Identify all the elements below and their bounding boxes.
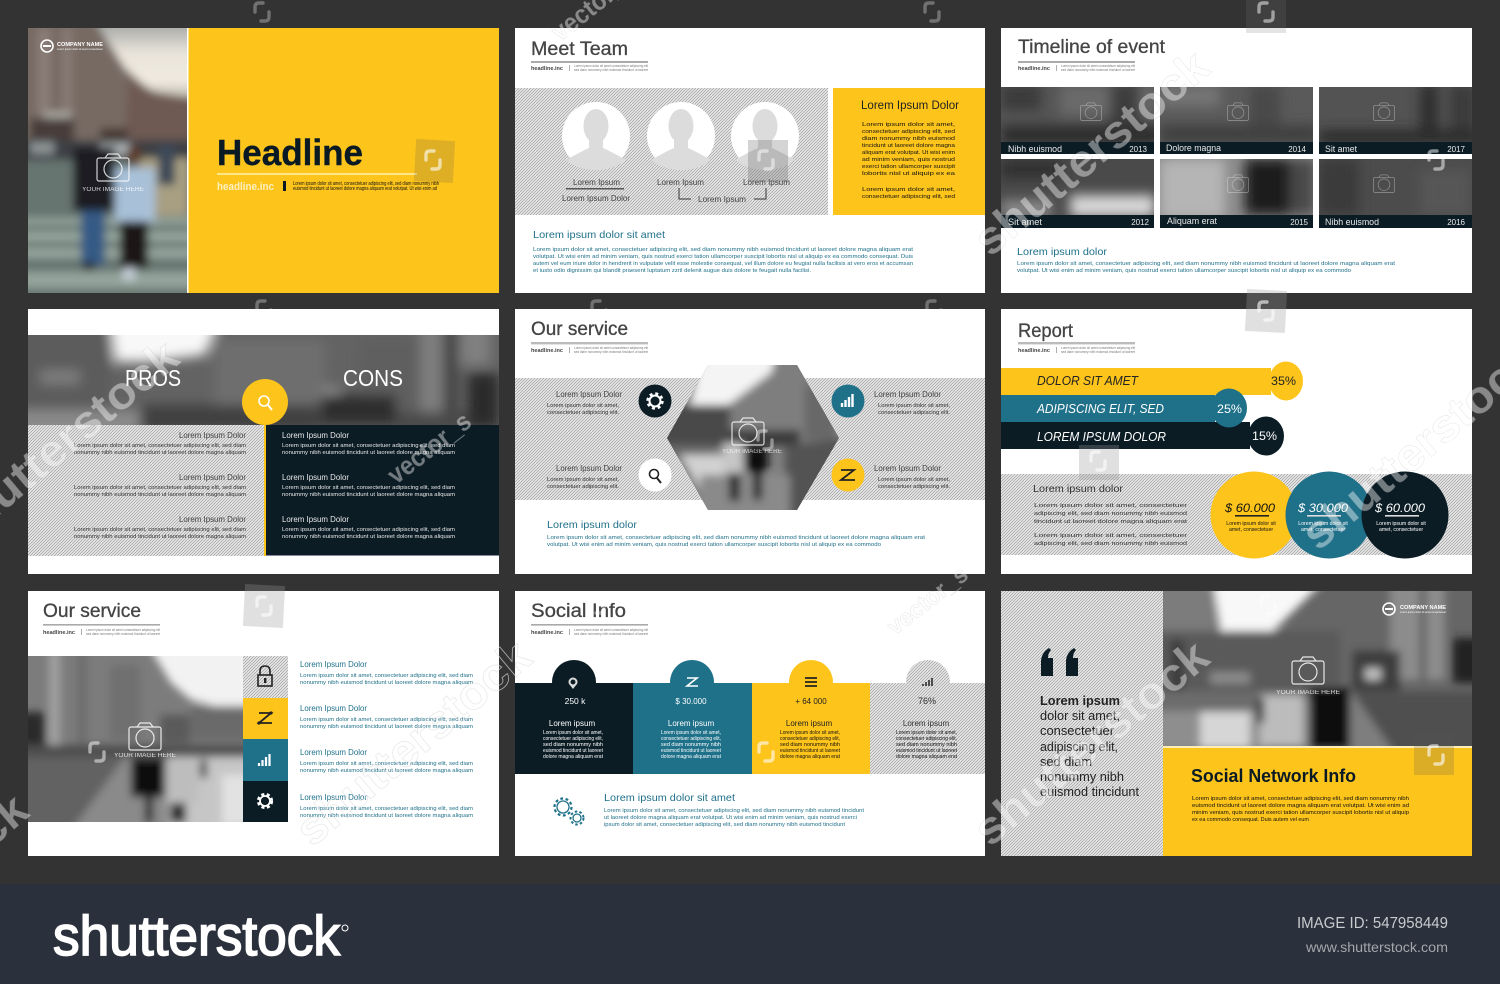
stat circle: yellow: amet, consectetuer <box>1229 527 1273 533</box>
bar chart: DOLOR SIT AMET <box>1037 374 1139 388</box>
slide heading: sed diam nonummy nibh euismod tincidunt ut laoreet <box>1061 350 1135 354</box>
report text: adipiscing elit, sed diam nonummy nibh euismod <box>1034 541 1187 547</box>
slide heading: Lorem ipsum dolor sit amet consectetuer adipiscing elit <box>1061 346 1135 350</box>
slide heading <box>43 601 160 636</box>
hatched band <box>515 88 828 215</box>
timeline body text <box>1017 246 1395 274</box>
pros column: Lorem ipsum dolor sit amet, consectetuer adipiscing elit, sed diam <box>74 527 246 533</box>
quote text <box>1040 693 1139 799</box>
slide heading <box>531 319 648 354</box>
stat column: dark: sed diam nonummy nibh <box>543 742 603 748</box>
service list text: Lorem Ipsum Dolor <box>300 659 367 669</box>
stock watermark overlays: vector_s <box>882 561 974 641</box>
cover subheading: euismod tincidunt ut laoreet dolore magna aliquam erat volutpat. Ut wisi enim ad <box>293 186 437 192</box>
stat column: yellow: sed diam nonummy nibh <box>780 742 840 748</box>
pros label: PROS <box>125 365 181 391</box>
team member names: Lorem Ipsum <box>573 177 620 187</box>
service items: Lorem Ipsum Dolor <box>874 389 941 399</box>
service items: consectetuer adipiscing elit. <box>547 484 619 490</box>
bar chart: ADIPISCING ELIT, SED <box>1036 402 1164 416</box>
pros column <box>28 425 264 556</box>
timeline card 2014: Dolore magna <box>1166 143 1221 153</box>
stat column: hatched: dolore magna aliquam erat <box>896 754 958 760</box>
timeline card 2016 <box>1319 159 1472 228</box>
social body text: ipsum dolor sit amet, consectetuer adipiscing elit, sed diam nonummy nibh euismod tincidunt <box>604 822 845 828</box>
stat column: teal: Lorem ipsum dolor sit amet, <box>661 730 721 736</box>
yellow info block: Social Network Info <box>1191 766 1356 786</box>
quote text: dolor sit amet, <box>1040 708 1120 723</box>
panel: meet team slide <box>515 28 985 293</box>
stat column: hatched: Lorem ipsum <box>903 719 949 728</box>
stat column: yellow: dolore magna aliquam erat <box>780 754 841 760</box>
social body text: Lorem ipsum dolor sit amet <box>604 792 735 804</box>
service items: Lorem Ipsum Dolor <box>556 463 622 473</box>
cover subheading: headline.inc <box>217 181 274 193</box>
report text <box>1033 483 1188 547</box>
icon: gears <box>554 798 584 824</box>
timeline card 2016: Nibh euismod <box>1325 217 1379 227</box>
stat column: yellow: consectetuer adipiscing elit, <box>780 736 840 742</box>
report text: Lorem ipsum dolor <box>1033 483 1124 495</box>
stat column: teal: consectetuer adipiscing elit, <box>661 736 721 742</box>
slide heading: Report <box>1018 321 1074 342</box>
slide heading: Lorem ipsum dolor sit amet consectetuer adipiscing elit <box>574 64 648 68</box>
stock watermark overlays: vector_s <box>381 406 477 490</box>
stat column: dark <box>515 660 633 774</box>
service items: Lorem ipsum dolor sit amet, <box>878 477 950 483</box>
timeline card 2013 <box>1001 87 1154 154</box>
stat circle: dark <box>1362 472 1448 558</box>
icon: search badge <box>638 458 672 492</box>
yellow info box: consectetuer adipiscing elit, sed <box>862 194 955 200</box>
stat column: teal: $ 30.000 <box>675 697 707 706</box>
cons column: nonummy nibh euismod tincidunt ut laoreet dolore magna aliquam <box>282 492 455 498</box>
cons column: Lorem ipsum dolor sit amet, consectetuer adipiscing elit, sed diam <box>282 527 455 533</box>
cons column: nonummy nibh euismod tincidunt ut laoreet dolore magna aliquam <box>282 534 455 540</box>
slide heading: headline.inc <box>531 66 563 72</box>
timeline card 2015 <box>1160 159 1313 228</box>
yellow info box: exerci tation ullamcorper suscipit <box>862 164 955 170</box>
service items: Lorem ipsum dolor sit amet, <box>878 403 950 409</box>
cons column: Lorem Ipsum Dolor <box>282 514 349 524</box>
stock watermark overlays: shutterstock <box>963 629 1219 856</box>
hatched band <box>515 378 985 500</box>
panel: timeline of event slide <box>995 28 1479 293</box>
hexagon photo: YOUR IMAGE HERE <box>722 449 782 455</box>
service photo <box>28 656 243 822</box>
stat column: yellow: Lorem ipsum <box>786 719 832 728</box>
panel: pros and cons slide <box>10 309 520 574</box>
slide heading: Meet Team <box>531 39 628 60</box>
icon column <box>243 656 288 822</box>
stat column: dark: dolore magna aliquam erat <box>543 754 604 760</box>
stat column: dark: Lorem ipsum <box>549 719 595 728</box>
pros column: nonummy nibh euismod tincidunt ut laoreet dolore magna aliquam <box>74 492 246 498</box>
company logo: COMPANY NAME <box>57 42 104 48</box>
yellow info block: minim veniam, quis nostrud exerci tation ullamcorper suscipit lobortis nisl ut aliquip <box>1192 810 1409 816</box>
icon: bars <box>259 754 270 766</box>
slide heading: headline.inc <box>531 630 563 636</box>
shutterstock logo: shutterstock <box>53 904 341 967</box>
cons column: Lorem ipsum dolor sit amet, consectetuer adipiscing elit, sed diam <box>282 443 455 449</box>
slide heading: sed diam nonummy nibh euismod tincidunt ut laoreet <box>574 68 648 72</box>
stat column: teal: Lorem ipsum <box>668 719 714 728</box>
stat column: dark: euismod tincidunt ut laoreet <box>543 748 604 754</box>
quote text: consectetuer <box>1040 723 1115 738</box>
stock watermark overlays: shutterstock <box>963 39 1219 266</box>
report text: Lorem ipsum dolor sit amet, consectetuer <box>1034 533 1187 539</box>
hatched band <box>1001 474 1472 555</box>
cons column: nonummy nibh euismod tincidunt ut laoreet dolore magna aliquam <box>282 450 455 456</box>
stat circle: yellow <box>1210 472 1298 558</box>
stat column: yellow: + 64 000 <box>795 697 827 706</box>
timeline card 2013: Nibh euismod <box>1008 144 1062 154</box>
bar chart: 15% <box>1252 429 1277 443</box>
cover subheading <box>217 181 439 193</box>
slide heading: Our service <box>531 319 628 340</box>
stat circle: yellow: $ 60.000 <box>1224 501 1275 515</box>
service list text: nonummy nibh euismod tincidunt ut laoreet dolore magna aliquam <box>300 768 473 774</box>
slide heading: sed diam nonummy nibh euismod tincidunt ut laoreet <box>574 632 648 636</box>
stat column: hatched: sed diam nonummy nibh <box>896 742 957 748</box>
stat column: hatched: consectetuer adipiscing elit, <box>896 736 957 742</box>
service items: consectetuer adipiscing elit. <box>878 484 950 490</box>
image placeholder <box>82 154 144 193</box>
timeline body text: volutpat. Ut wisi enim ad minim veniam, quis nostrud exerci tation ullamcorper suscipit lobortis nisl ut aliquip ex ea commodo <box>1017 268 1351 274</box>
slide heading <box>1018 321 1135 354</box>
service list text: Lorem Ipsum Dolor <box>300 747 367 757</box>
bar chart: LOREM IPSUM DOLOR <box>1037 430 1166 444</box>
icon: gear badge <box>638 384 672 418</box>
slide heading: headline.inc <box>531 348 563 354</box>
service items: Lorem Ipsum Dolor <box>874 463 941 473</box>
image placeholders <box>1081 103 1394 192</box>
stat column: teal: euismod tincidunt ut laoreet <box>661 748 722 754</box>
slide heading: Social Info <box>531 601 626 622</box>
slide heading: sed diam nonummy nibh euismod tincidunt ut laoreet <box>86 632 160 636</box>
yellow info box: Lorem ipsum dolor sit amet, <box>862 122 956 128</box>
pros column: Lorem Ipsum Dolor <box>179 430 246 440</box>
icon: quote marks <box>1041 648 1078 676</box>
social photo <box>1163 591 1472 746</box>
bar chart <box>1001 362 1303 456</box>
timeline card 2017: 2017 <box>1447 145 1466 154</box>
service items: Lorem ipsum dolor sit amet, <box>547 477 619 483</box>
yellow info box <box>833 88 985 215</box>
cons column: Lorem ipsum dolor sit amet, consectetuer adipiscing elit, sed diam <box>282 485 455 491</box>
slide heading: Timeline of event <box>1018 37 1166 58</box>
stat column: hatched <box>870 660 985 774</box>
stat column: dark: 250 k <box>565 696 586 706</box>
pros column: Lorem Ipsum Dolor <box>179 472 246 482</box>
company logo: Lorem ipsum dolor sit amet consectetuer <box>57 47 103 51</box>
service items: consectetuer adipiscing elit. <box>547 410 619 416</box>
company logo <box>1383 603 1447 615</box>
social body text: Lorem ipsum dolor sit amet, consectetuer adipiscing elit, sed diam nonummy nibh euismod tincidunt <box>604 808 864 814</box>
yellow info box: Lorem ipsum dolor sit amet, <box>862 187 956 193</box>
stat column: teal: sed diam nonummy nibh <box>661 742 721 748</box>
slide heading: sed diam nonummy nibh euismod tincidunt ut laoreet <box>574 350 648 354</box>
service list text: nonummy nibh euismod tincidunt ut laoreet dolore magna aliquam <box>300 724 473 730</box>
timeline card 2013: 2013 <box>1129 145 1148 154</box>
yellow info block <box>1163 746 1472 856</box>
social photo: YOUR IMAGE HERE <box>1276 690 1340 696</box>
quote text: sed diam <box>1040 754 1092 769</box>
service list text: nonummy nibh euismod tincidunt ut laoreet dolore magna aliquam <box>300 680 473 686</box>
stat column: teal: dolore magna aliquam erat <box>661 754 722 760</box>
team member names: Lorem Ipsum <box>657 177 704 187</box>
service items: Lorem ipsum dolor sit amet, <box>547 403 619 409</box>
stat circle: teal: Lorem ipsum dolor sit <box>1298 521 1348 527</box>
service list text: Lorem ipsum dolor sit amet, consectetuer adipiscing elit, sed diam <box>300 717 473 723</box>
stock watermark overlays: shutterstock <box>285 629 541 856</box>
stat column: hatched: Lorem ipsum dolor sit amet, <box>896 730 957 736</box>
image placeholder: YOUR IMAGE HERE <box>82 187 144 193</box>
service list text: nonummy nibh euismod tincidunt ut laoreet dolore magna aliquam <box>300 813 473 819</box>
slide heading: Lorem ipsum dolor sit amet consectetuer adipiscing elit <box>574 628 648 632</box>
slide heading <box>531 39 648 72</box>
service body text: Lorem ipsum dolor sit amet, consectetuer adipiscing elit, sed diam nonummy nibh euismod tincidunt ut laoreet dolore magna aliquam erat <box>547 535 925 541</box>
stat circle: yellow: Lorem ipsum dolor sit <box>1226 521 1276 527</box>
report text: adipiscing elit, sed diam nonummy nibh euismod <box>1034 511 1187 517</box>
timeline card 2015: 2015 <box>1290 218 1309 227</box>
quote text: euismod tincidunt <box>1040 784 1139 799</box>
hexagon photo <box>667 365 839 510</box>
icon: search badge <box>242 379 288 425</box>
pros column: nonummy nibh euismod tincidunt ut laoreet dolore magna aliquam <box>74 450 246 456</box>
stat circle: dark: amet, consectetuer <box>1379 527 1423 533</box>
team body text <box>533 229 913 274</box>
social body text <box>604 792 864 828</box>
company logo: COMPANY NAME <box>1400 605 1447 611</box>
service items: Lorem Ipsum Dolor <box>556 389 622 399</box>
team body text: et iusto odio dignissim qui blandit praesent luptatum zzril delenit augue duis dolore te feugait nulla facilisi. <box>533 268 811 274</box>
panel: social network quote slide <box>1001 580 1485 856</box>
service items: consectetuer adipiscing elit. <box>878 410 950 416</box>
icon: share <box>257 711 273 725</box>
footer bar <box>0 884 1500 984</box>
yellow info box: aliquam erat volutpat. Ut wisi enim <box>862 150 955 156</box>
website: www.shutterstock.com <box>1305 939 1448 955</box>
bar chart: 35% <box>1271 374 1296 388</box>
stat column: yellow: Lorem ipsum dolor sit amet, <box>780 730 840 736</box>
icon: lock <box>258 666 272 686</box>
panel: social info slide <box>515 591 985 856</box>
timeline card 2012: 2012 <box>1131 218 1150 227</box>
service list text: Lorem ipsum dolor sit amet, consectetuer adipiscing elit, sed diam <box>300 673 473 679</box>
company logo <box>41 40 104 52</box>
stat circle: teal: $ 30.000 <box>1297 501 1348 515</box>
service body text <box>547 519 925 548</box>
service body text: Lorem ipsum dolor <box>547 519 638 531</box>
slide heading: sed diam nonummy nibh euismod tincidunt ut laoreet <box>1061 68 1135 72</box>
panel: our service hexagon slide <box>515 309 985 574</box>
slide heading: Our service <box>43 601 141 622</box>
timeline card 2014 <box>1160 87 1313 154</box>
stat column: dark: Lorem ipsum dolor sit amet, <box>543 730 603 736</box>
cons label: CONS <box>343 365 403 391</box>
bar chart: 25% <box>1217 402 1242 416</box>
quote text: Lorem ipsum <box>1040 693 1120 708</box>
slide heading: Lorem ipsum dolor sit amet consectetuer adipiscing elit <box>86 628 160 632</box>
report text: tincidunt ut laoreet dolore magna aliquam erat <box>1034 519 1188 525</box>
yellow info block: Lorem ipsum dolor sit amet, consectetuer adipiscing elit, sed diam nonummy nibh <box>1192 796 1409 802</box>
team member avatars <box>562 102 799 170</box>
quote text: nonummy nibh <box>1040 769 1124 784</box>
report text: Lorem ipsum dolor sit amet, consectetuer <box>1034 503 1187 509</box>
service list text: Lorem Ipsum Dolor <box>300 792 367 802</box>
pros column: Lorem ipsum dolor sit amet, consectetuer adipiscing elit, sed diam <box>74 485 246 491</box>
slide heading <box>1018 37 1166 72</box>
stat column: hatched: 76% <box>918 696 936 706</box>
slide heading: headline.inc <box>1018 348 1050 354</box>
team member names: Lorem Ipsum <box>698 194 746 204</box>
quote text: adipiscing elit, <box>1040 739 1118 754</box>
stat column: dark: consectetuer adipiscing elit, <box>543 736 603 742</box>
pros cons photo <box>28 335 499 425</box>
team body text: Lorem ipsum dolor sit amet <box>533 229 665 241</box>
pros column: Lorem Ipsum Dolor <box>179 514 246 524</box>
cons column: Lorem Ipsum Dolor <box>282 430 349 440</box>
timeline card 2012 <box>1001 159 1154 228</box>
panel: report slide <box>1001 309 1472 574</box>
cover subheading: Lorem ipsum dolor sit amet, consectetuer adipiscing elit, sed diam nonummy nibh <box>293 181 439 187</box>
stat circle: teal: amet, consectetuer <box>1301 527 1345 533</box>
timeline body text: Lorem ipsum dolor sit amet, consectetuer adipiscing elit, sed diam nonummy nibh euismod tincidunt ut laoreet dolore magna aliquam erat <box>1017 261 1395 267</box>
stat circle: dark: $ 60.000 <box>1374 501 1425 515</box>
timeline card 2016: 2016 <box>1447 218 1466 227</box>
service body text: volutpat. Ut wisi enim ad minim veniam, quis nostrud exerci tation ullamcorper suscipit lobortis nisl ut aliquip ex ea commodo <box>547 542 881 548</box>
pros column: nonummy nibh euismod tincidunt ut laoreet dolore magna aliquam <box>74 534 246 540</box>
service list text: Lorem Ipsum Dolor <box>300 703 367 713</box>
slide heading: headline.inc <box>1018 66 1050 72</box>
slide heading: Lorem ipsum dolor sit amet consectetuer adipiscing elit <box>574 346 648 350</box>
timeline card 2015: Aliquam erat <box>1167 216 1217 226</box>
yellow info box: diam nonummy nibh euismod <box>862 136 955 142</box>
yellow info box: tincidunt ut laoreet dolore magna <box>862 143 956 149</box>
service list text <box>300 659 473 819</box>
team body text: Lorem ipsum dolor sit amet, consectetuer adipiscing elit, sed diam nonummy nibh euismod tincidunt ut laoreet dolore magna aliquam erat <box>533 247 913 253</box>
slide heading: headline.inc <box>43 630 75 636</box>
team body text: autem vel eum iriure dolor in hendrerit in vulputate velit esse molestie consequat, vel illum dolore eu feugiat nulla facilisis at vero eros et accumsan <box>533 261 913 267</box>
team member names: Lorem Ipsum <box>743 177 790 187</box>
timeline card 2017 <box>1319 87 1472 154</box>
team member names <box>562 177 790 204</box>
cons column: Lorem Ipsum Dolor <box>282 472 349 482</box>
yellow info block: ex ea commodo consequat. Duis autem vel eum <box>1192 817 1309 823</box>
timeline body text: Lorem ipsum dolor <box>1017 246 1108 258</box>
panel: our service list slide <box>15 591 499 856</box>
yellow info block: euismod tincidunt ut laoreet dolore magna aliquam erat volutpat. Ut wisi enim ad <box>1192 803 1409 809</box>
cons column <box>264 425 499 556</box>
service list text: Lorem ipsum dolor sit amet, consectetuer adipiscing elit, sed diam <box>300 806 473 812</box>
slide heading: Lorem ipsum dolor sit amet consectetuer adipiscing elit <box>1061 64 1135 68</box>
company logo: Lorem ipsum dolor sit amet consectetuer <box>1400 610 1446 614</box>
icon: bars badge <box>832 384 864 418</box>
stat column: yellow <box>752 660 870 774</box>
stat column: teal <box>633 660 752 774</box>
yellow info box: lobortis nisl ut aliquip ex ea <box>862 171 956 177</box>
cover headline: Headline <box>217 132 363 173</box>
panel: cover slide <box>28 28 499 293</box>
stat circle: dark: Lorem ipsum dolor sit <box>1376 521 1426 527</box>
team member names: Lorem Ipsum Dolor <box>562 193 630 203</box>
cover street photo <box>28 28 187 293</box>
icon: gear <box>258 794 272 808</box>
pros column: Lorem ipsum dolor sit amet, consectetuer adipiscing elit, sed diam <box>74 443 246 449</box>
timeline card 2012: Sit amet <box>1008 217 1043 227</box>
team body text: volutpat. Ut wisi enim ad minim veniam, quis nostrud exerci tation ullamcorper suscipit lobortis nisl ut aliquip ex ea commodo consequat. Duis <box>533 254 913 260</box>
stat column: hatched: euismod tincidunt ut laoreet <box>896 748 958 754</box>
service photo: YOUR IMAGE HERE <box>114 753 176 759</box>
service list text: Lorem ipsum dolor sit amet, consectetuer adipiscing elit, sed diam <box>300 761 473 767</box>
icon: share badge <box>832 458 864 492</box>
yellow info box: consectetuer adipiscing elit, sed <box>862 129 955 135</box>
image id: IMAGE ID: 547958449 <box>1297 915 1448 932</box>
timeline card 2017: Sit amet <box>1325 144 1357 154</box>
timeline card 2014: 2014 <box>1288 145 1307 154</box>
stat column: yellow: euismod tincidunt ut laoreet <box>780 748 841 754</box>
stat circle: teal <box>1286 472 1372 558</box>
slide heading <box>531 601 648 636</box>
social body text: ut laoreet dolore magna aliquam erat volutpat. Ut wisi enim ad minim veniam, quis nostrud exerci <box>604 815 857 821</box>
service items <box>547 389 950 490</box>
yellow info box: Lorem Ipsum Dolor <box>861 98 959 112</box>
yellow info box: ad minim veniam, quis nostrud <box>862 157 955 163</box>
